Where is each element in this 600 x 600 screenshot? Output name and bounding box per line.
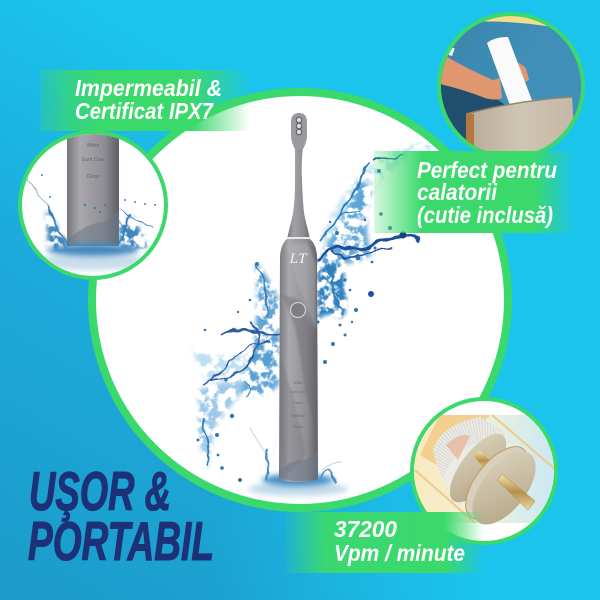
mode labels: Sensitive <box>291 414 305 418</box>
label text: Certificat IPX7 <box>75 98 214 124</box>
water line <box>67 210 119 246</box>
label text <box>417 157 557 228</box>
illustration: water splash <box>192 142 452 496</box>
label text: Impermeabil & <box>75 75 222 101</box>
label text: Vpm / minute <box>334 540 465 566</box>
yellow strip <box>483 16 548 26</box>
water droplets <box>196 169 406 492</box>
bag side <box>466 113 474 146</box>
label text: Perfect pentru <box>417 157 557 183</box>
mode labels: Clean <box>293 401 303 405</box>
water mass, arc upper right <box>318 180 372 265</box>
bag rim <box>466 97 572 114</box>
pale water wave, left <box>192 335 280 381</box>
arm <box>440 55 502 100</box>
panel: waterproof circle <box>20 128 166 278</box>
backdrop <box>412 415 557 523</box>
mode labels <box>81 143 105 180</box>
neck <box>287 146 310 239</box>
mode labels <box>290 381 306 429</box>
mode labels: Gum Care <box>81 157 105 163</box>
pool shadow <box>35 254 151 270</box>
label text: calatorii <box>417 179 498 205</box>
title <box>28 460 214 572</box>
glass tube lines <box>415 415 556 523</box>
title: PORTABIL <box>28 510 214 572</box>
orange ribbed coil <box>420 415 490 470</box>
cylinder ribs <box>425 422 510 470</box>
bristles <box>296 117 302 135</box>
handle highlight <box>286 243 316 330</box>
label: waterproof <box>40 70 250 131</box>
label text: 37200 <box>334 516 397 542</box>
handle close-up <box>67 128 119 246</box>
second disc face <box>460 441 548 535</box>
panel: main white circle <box>92 92 508 508</box>
blue water stroke, lower left <box>203 263 268 465</box>
ribbed cylinder <box>433 417 505 505</box>
mode labels: Polish <box>293 425 303 429</box>
droplets <box>41 174 156 213</box>
handle <box>279 239 318 482</box>
dark water stroke, left <box>202 322 280 385</box>
gold shaft, front <box>497 474 535 510</box>
pool <box>47 244 139 256</box>
splash <box>28 178 153 245</box>
collar <box>287 237 310 239</box>
backdrop <box>441 16 581 151</box>
water pool soft shadow <box>248 482 348 496</box>
label text <box>75 75 222 124</box>
label text <box>334 516 465 566</box>
splash water mass <box>46 210 148 250</box>
orange reflection <box>446 435 470 460</box>
fingers behind tube <box>518 62 529 84</box>
second disc rim <box>454 436 540 530</box>
bag <box>468 98 574 151</box>
mode labels: Clean <box>86 174 100 180</box>
pale water wave, right <box>320 142 436 248</box>
water mass, left of handle <box>240 262 279 396</box>
mode labels: White <box>294 381 303 385</box>
brush head <box>291 113 307 149</box>
label text: (cutie inclusă) <box>417 202 553 228</box>
dark water stroke, right <box>317 155 420 258</box>
base splash <box>265 450 338 482</box>
water mass, lower left <box>198 381 250 470</box>
mode labels: Gum Care <box>290 390 306 394</box>
first disc <box>440 425 516 511</box>
illustration: toothbrush <box>279 113 318 482</box>
white tube <box>487 37 533 108</box>
label: vibrations <box>286 512 484 573</box>
cuff <box>448 48 455 56</box>
power button <box>290 302 306 318</box>
label: travel <box>374 151 574 233</box>
panel: travel circle <box>437 12 585 155</box>
dark shade lower left <box>441 82 504 142</box>
water line on handle <box>279 450 318 481</box>
title: UŞOR & <box>29 460 171 522</box>
gold shaft, rear <box>473 451 492 470</box>
base splash spray <box>250 428 342 470</box>
blue water stroke, upper right <box>320 163 370 315</box>
handle facets <box>280 295 317 478</box>
water pool at base <box>262 474 334 486</box>
panel: motor circle <box>412 399 557 543</box>
mode labels: White <box>87 143 100 149</box>
water mass, right of handle <box>317 259 347 322</box>
logo: LT <box>288 251 308 267</box>
